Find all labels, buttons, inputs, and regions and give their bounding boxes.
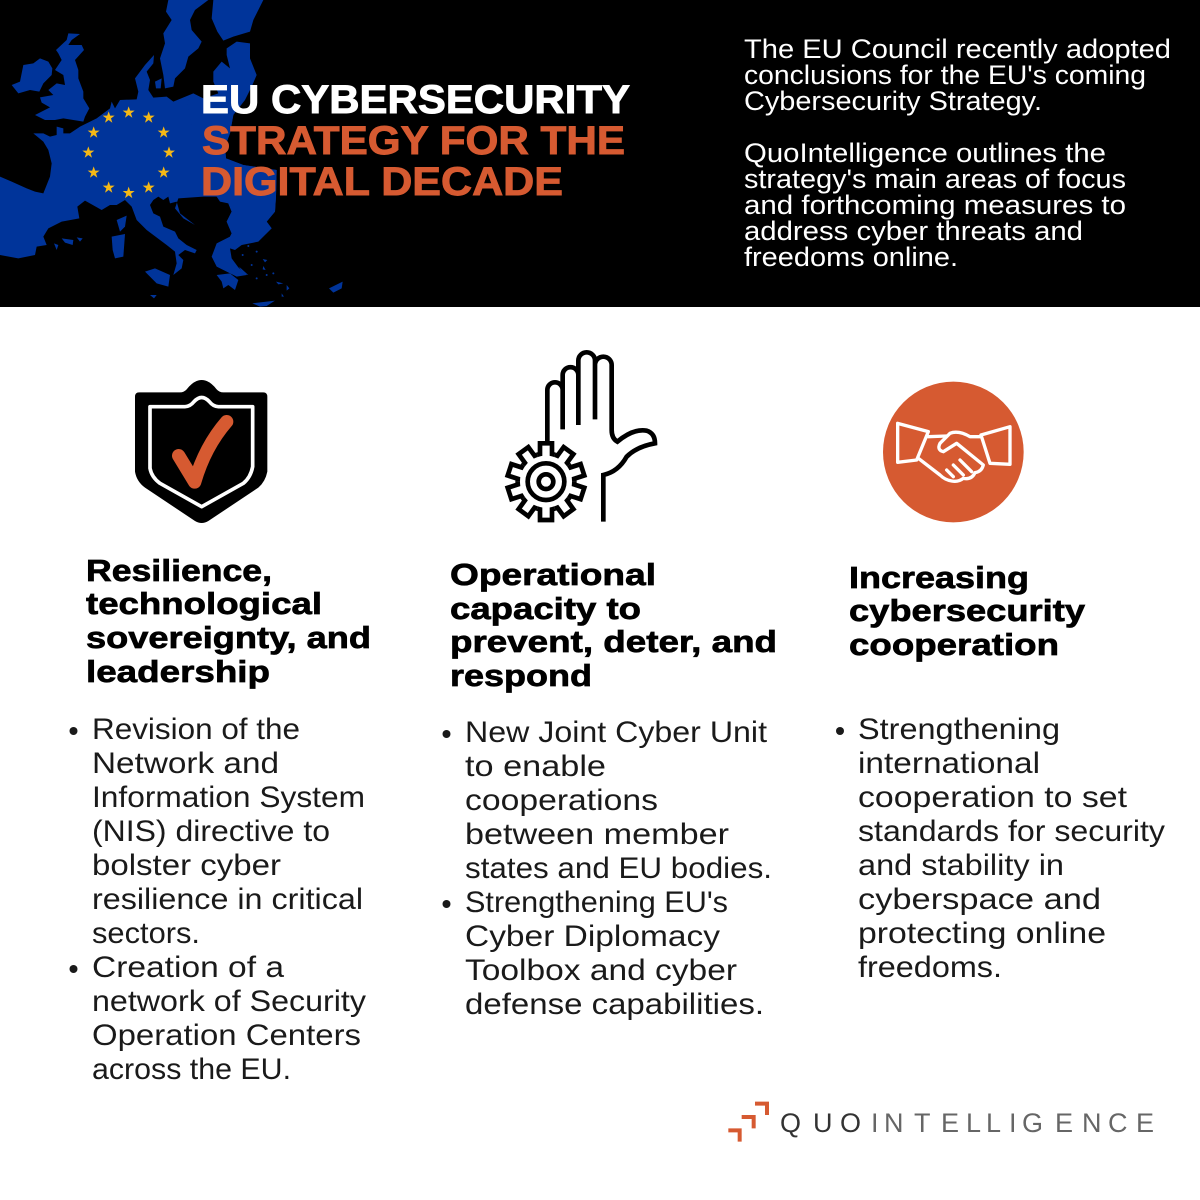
bullet list: operational capacity: Cyber Diplomacy (465, 920, 720, 953)
bullet list: cooperation: cyberspace and (858, 883, 1101, 916)
bullet list: resilience (70, 713, 366, 1086)
bullet list: operational capacity: between member (465, 818, 729, 851)
heading: operational capacity: Operational (450, 557, 656, 592)
bullet list: operational capacity: Strengthening EU's (465, 886, 728, 919)
intro text: QuoIntelligence outlines the (744, 138, 1106, 168)
heading: resilience: technological (86, 586, 322, 621)
heading: resilience (86, 553, 371, 689)
intro text: address cyber threats and (744, 216, 1083, 246)
wordmark: QUO (780, 1108, 861, 1138)
bullet list: resilience: network of Security (92, 985, 366, 1018)
icon: logo chevrons (728, 1102, 769, 1142)
bullet list: cooperation (836, 713, 1165, 984)
bullet list: operational capacity: cooperations (465, 784, 658, 817)
intro text: strategy's main areas of focus (744, 164, 1126, 194)
bullet list: cooperation: and stability in (858, 849, 1064, 882)
heading: resilience: Resilience, (86, 553, 272, 588)
bullet list: cooperation: standards for security (858, 815, 1165, 848)
map of Europe with EU stars (0, 0, 343, 307)
heading: resilience: sovereignty, and (86, 620, 371, 655)
bullet list: operational capacity: New Joint Cyber Unit (465, 716, 768, 749)
bullet list: cooperation: Strengthening (858, 713, 1060, 746)
title (201, 78, 630, 204)
icon: handshake in orange circle (883, 382, 1024, 522)
heading: cooperation: cooperation (849, 627, 1059, 662)
title: STRATEGY FOR THE (202, 119, 625, 163)
bullet list: resilience: resilience in critical (92, 883, 363, 916)
wordmark: INTELLIGENCE (871, 1108, 1154, 1138)
panel: operational capacity (442, 352, 777, 1021)
bullet list: resilience: Operation Centers (92, 1019, 361, 1052)
bullet list: resilience: Information System (92, 781, 365, 814)
intro text: The EU Council recently adopted (744, 34, 1171, 64)
bullet list: cooperation: protecting online (858, 917, 1106, 950)
bullet list: cooperation: cooperation to set (858, 781, 1128, 814)
bullet list: resilience: Creation of a (92, 951, 284, 984)
heading: operational capacity (450, 557, 777, 693)
bullet list: resilience: (NIS) directive to (92, 815, 330, 848)
bullet list: operational capacity: Toolbox and cyber (465, 954, 737, 987)
intro text: Cybersecurity Strategy. (744, 86, 1042, 116)
intro text: freedoms online. (744, 242, 958, 272)
bullet list: operational capacity: states and EU bodies. (465, 852, 772, 885)
heading: operational capacity: prevent, deter, and (450, 624, 777, 659)
bullet list: operational capacity: to enable (465, 750, 606, 783)
panel: resilience (70, 380, 371, 1086)
bullet list: operational capacity: defense capabilities. (465, 988, 764, 1021)
intro text: conclusions for the EU's coming (744, 60, 1146, 90)
icon: hand with gear (507, 352, 655, 522)
bullet list: cooperation: international (858, 747, 1040, 780)
heading: cooperation: Increasing (849, 560, 1029, 595)
bullet list: operational capacity (442, 716, 772, 1021)
intro text: and forthcoming measures to (744, 190, 1126, 220)
heading: cooperation: cybersecurity (849, 593, 1086, 628)
logo: QuoIntelligence (728, 1102, 1154, 1142)
intro text (744, 34, 1171, 272)
icon: shield with check mark (135, 380, 267, 523)
bullet list: resilience: sectors. (92, 917, 200, 950)
bullet list: resilience: Revision of the (92, 713, 300, 746)
bullet list: resilience: Network and (92, 747, 279, 780)
heading: operational capacity: capacity to (450, 591, 641, 626)
bullet list: resilience: across the EU. (92, 1053, 291, 1086)
heading: cooperation (849, 560, 1086, 662)
heading: resilience: leadership (86, 654, 270, 689)
bullet list: cooperation: freedoms. (858, 951, 1002, 984)
heading: operational capacity: respond (450, 658, 592, 693)
title: DIGITAL DECADE (201, 160, 563, 204)
bullet list: resilience: bolster cyber (92, 849, 281, 882)
header band (0, 0, 1200, 307)
title: EU CYBERSECURITY (201, 78, 630, 122)
panel: cooperation (836, 382, 1165, 984)
